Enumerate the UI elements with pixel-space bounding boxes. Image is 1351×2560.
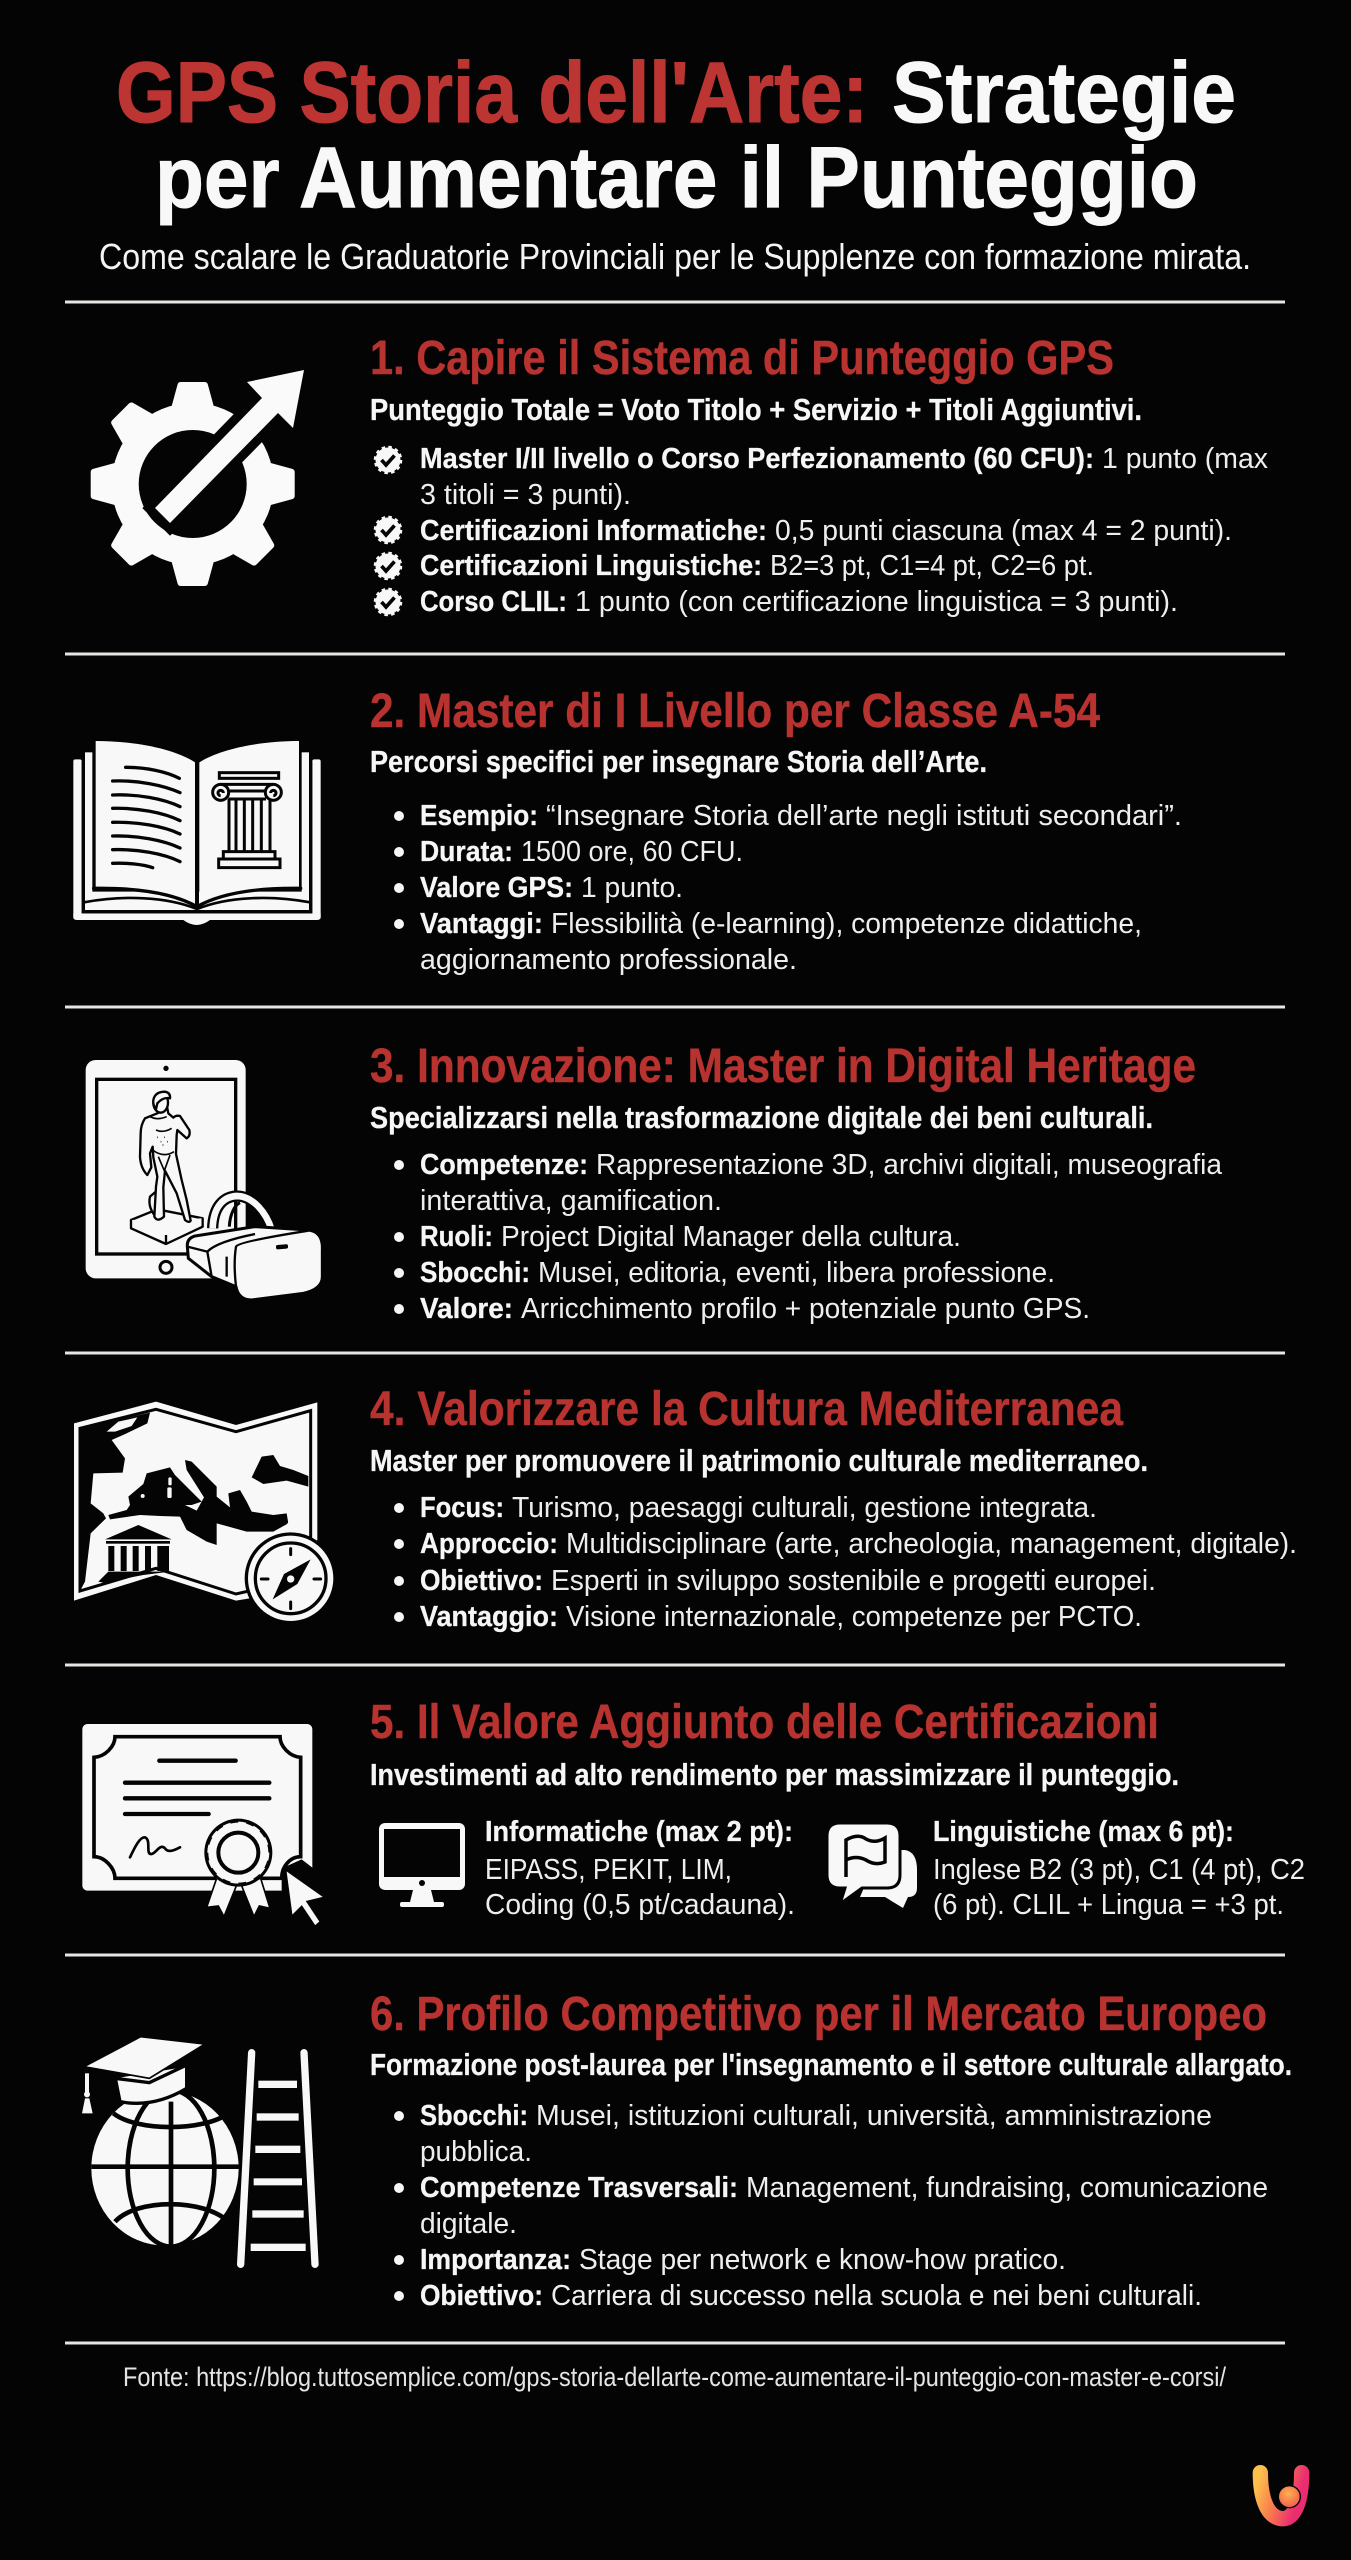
checklist: 1 punto (max [1102,443,1268,475]
checklist: Certificazioni Linguistiche: [420,550,762,582]
title: Strategie [892,45,1236,141]
icon: gear with arrow [91,370,304,586]
panel: 2 master di I livello [73,685,1182,976]
panel: 6 mercato europeo [82,1988,1292,2312]
checklist: 0,5 punti ciascuna (max 4 = 2 punti). [775,515,1232,547]
formula: Punteggio Totale = Voto Titolo + Servizio + Titoli Aggiuntivi. [370,392,1142,427]
bullet list: Approccio: [420,1528,558,1560]
checklist: 3 titoli = 3 punti). [420,479,631,511]
heading 2: 2. Master di I Livello per Classe A-54 [370,685,1100,738]
bullet list: Flessibilità (e-learning), competenze didattiche, [551,908,1142,940]
bullet list: pubblica. [420,2136,532,2168]
bullet list: Sbocchi: [420,1257,530,1289]
panel: 5 certificazioni [82,1696,1305,1927]
icon: globe with graduation cap and ladder [82,2037,315,2264]
bullet list: Competenze: [420,1149,588,1181]
checklist: B2=3 pt, C1=4 pt, C2=6 pt. [770,550,1094,582]
bullet list: 1500 ore, 60 CFU. [521,836,743,868]
bullet list [394,800,1182,976]
bullet list [394,1149,1223,1325]
intro: Percorsi specifici per insegnare Storia dell’Arte. [370,744,987,779]
bullet list: Project Digital Manager della cultura. [501,1221,961,1253]
panel: 3 digital heritage [86,1040,1223,1325]
heading 4: 4. Valorizzare la Cultura Mediterranea [370,1383,1123,1436]
bullet list: Stage per network e know-how pratico. [579,2244,1066,2276]
checklist: Certificazioni Informatiche: [420,515,767,547]
bullet list: Carriera di successo nella scuola e nei beni culturali. [551,2280,1202,2312]
icon: logo [1260,2473,1302,2519]
column: linguistiche [827,1816,1305,1921]
icon: certificate with seal and cursor [82,1724,325,1927]
column: linguistiche: Linguistiche (max 6 pt): [933,1816,1234,1848]
bullet list: Vantaggi: [420,908,543,940]
bullet list: Arricchimento profilo + potenziale punto GPS. [521,1293,1090,1325]
bullet list: Obiettivo: [420,1565,543,1597]
bullet list: Valore: [420,1293,513,1325]
icon: open book with column [73,741,321,925]
icon: map with temple and compass [74,1402,337,1624]
column: informatiche: Coding (0,5 pt/cadauna). [485,1889,795,1921]
bullet list [394,2100,1268,2312]
bullet list: Valore GPS: [420,872,573,904]
bullet list: Importanza: [420,2244,571,2276]
bullet list: Obiettivo: [420,2280,543,2312]
column: linguistiche: Inglese B2 (3 pt), C1 (4 pt), C2 [933,1854,1305,1886]
bullet list: interattiva, gamification. [420,1185,722,1217]
bullet list: Ruoli: [420,1221,493,1253]
column: informatiche: Informatiche (max 2 pt): [485,1816,793,1848]
bullet list: aggiornamento professionale. [420,944,797,976]
bullet list: “Insegnare Storia dell’arte negli istituti secondari”. [546,800,1182,832]
bullet list: Rappresentazione 3D, archivi digitali, museografia [596,1149,1223,1181]
checklist: Master I/II livello o Corso Perfezionamento (60 CFU): [420,443,1094,475]
bullet list: digitale. [420,2208,517,2240]
title: GPS Storia dell'Arte: [116,45,868,141]
panel: 4 cultura mediterranea [74,1383,1297,1633]
bullet list: Durata: [420,836,513,868]
icon: monitor [379,1823,465,1907]
bullet list: Esempio: [420,800,538,832]
icon: speech bubbles with flag [827,1823,917,1908]
icon: tablet with statue and VR headset [86,1060,322,1300]
heading 3: 3. Innovazione: Master in Digital Heritage [370,1040,1196,1093]
checklist: 1 punto (con certificazione linguistica = 3 punti). [575,586,1178,618]
subtitle: Come scalare le Graduatorie Provinciali per le Supplenze con formazione mirata. [99,236,1251,277]
checklist [376,443,1268,618]
bullet list: Competenze Trasversali: [420,2172,738,2204]
panel: 1 sistema di punteggio [91,332,1268,618]
bullet list: Visione internazionale, competenze per PCTO. [566,1601,1142,1633]
heading 5: 5. Il Valore Aggiunto delle Certificazioni [370,1696,1159,1749]
bullet list: Musei, istituzioni culturali, università, amministrazione [536,2100,1212,2132]
bullet list: 1 punto. [581,872,683,904]
bullet list: Esperti in sviluppo sostenibile e progetti europei. [551,1565,1156,1597]
bullet list: Vantaggio: [420,1601,558,1633]
intro: Specializzarsi nella trasformazione digitale dei beni culturali. [370,1100,1153,1135]
heading 1: 1. Capire il Sistema di Punteggio GPS [370,332,1114,385]
bullet list: Sbocchi: [420,2100,528,2132]
title [116,45,1236,226]
intro: Investimenti ad alto rendimento per massimizzare il punteggio. [370,1757,1179,1792]
bullet list: Multidisciplinare (arte, archeologia, management, digitale). [566,1528,1297,1560]
bullet list [394,1492,1297,1633]
column: informatiche [379,1816,795,1921]
bullet list: Focus: [420,1492,504,1524]
bullet list: Musei, editoria, eventi, libera professione. [538,1257,1055,1289]
column: informatiche: EIPASS, PEKIT, LIM, [485,1854,732,1886]
bullet list: Management, fundraising, comunicazione [746,2172,1268,2204]
title: per Aumentare il Punteggio [155,130,1198,226]
column: linguistiche: (6 pt). CLIL + Lingua = +3 pt. [933,1889,1284,1921]
checklist: Corso CLIL: [420,586,567,618]
intro: Master per promuovere il patrimonio culturale mediterraneo. [370,1443,1148,1478]
bullet list: Turismo, paesaggi culturali, gestione integrata. [512,1492,1097,1524]
